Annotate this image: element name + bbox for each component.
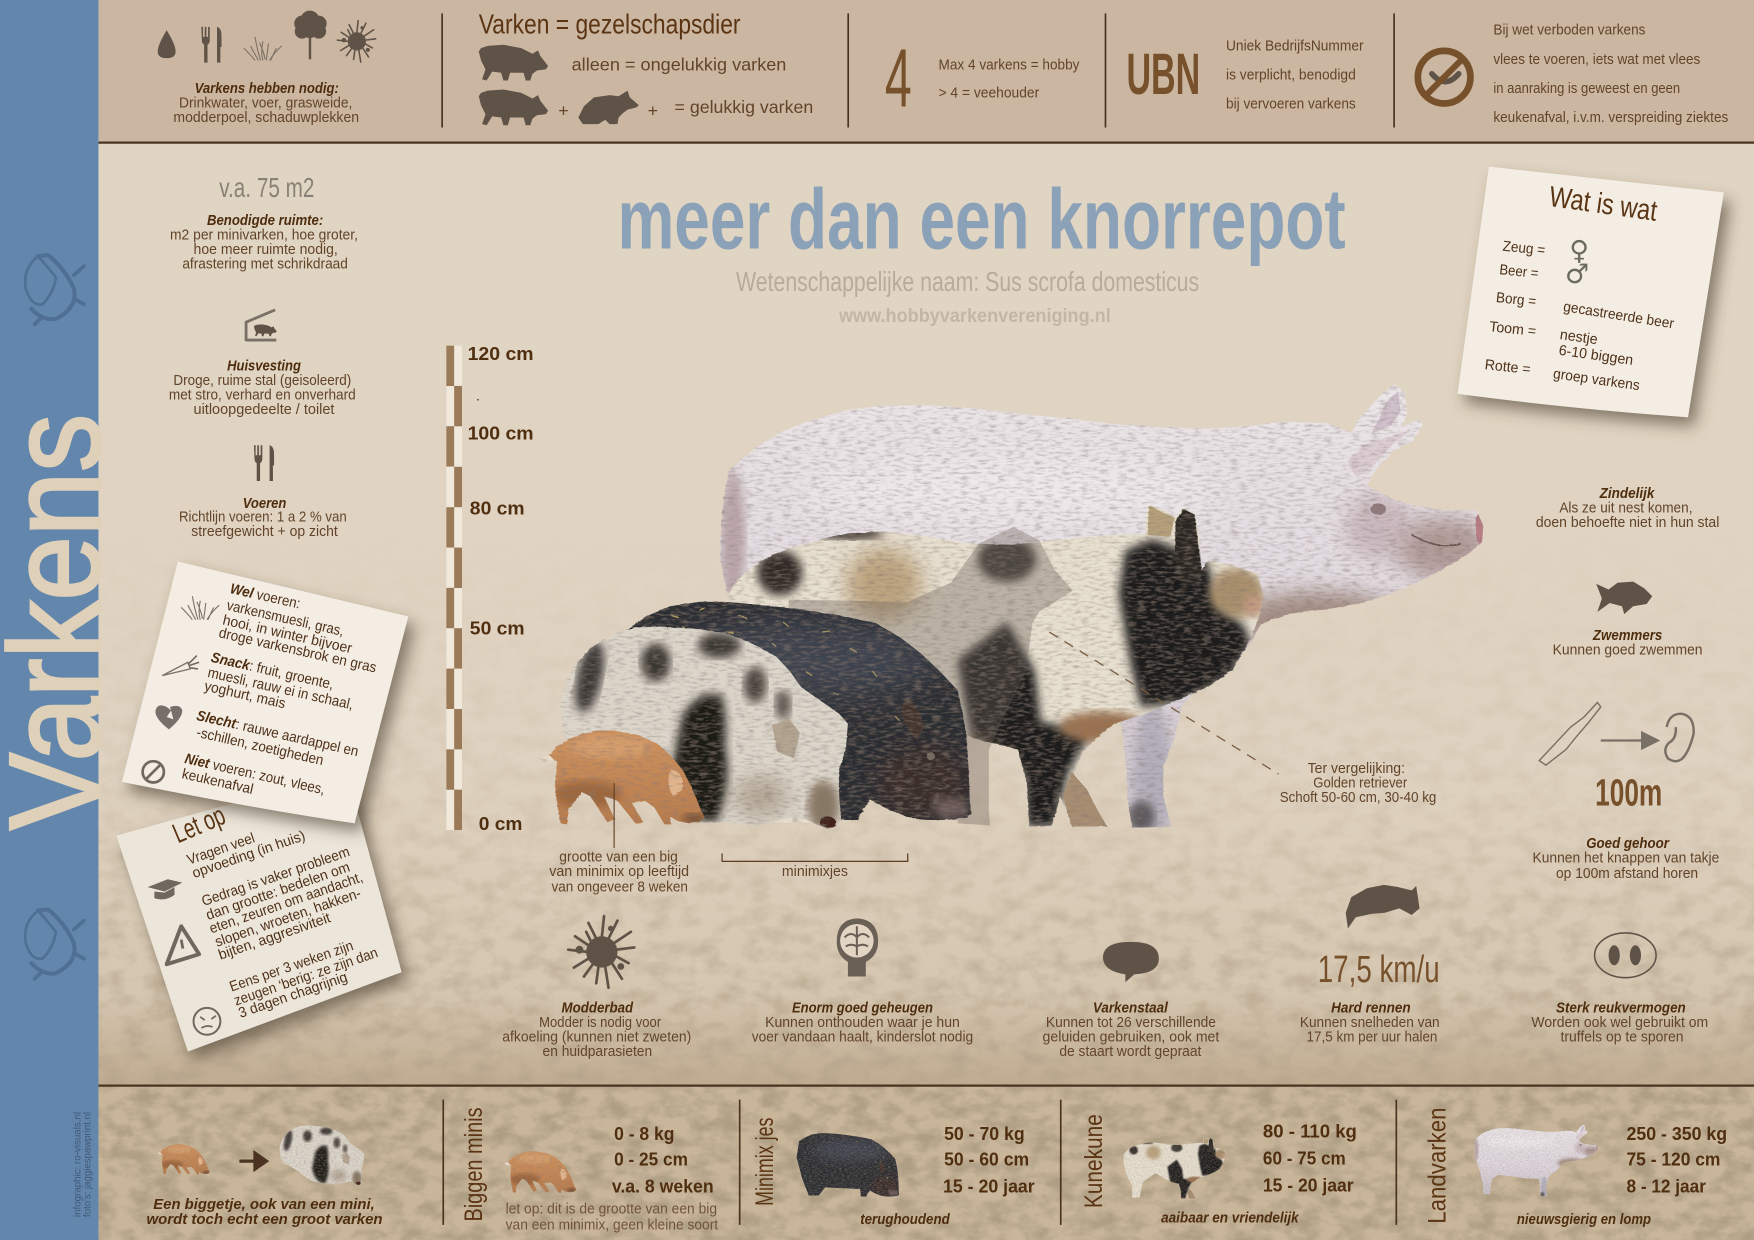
text: needs: modderpoel, schaduwplekken: [173, 109, 359, 126]
panel: minimix: 50 - 60 cm: [944, 1149, 1029, 1170]
heading: biggen minis: Biggen minis: [461, 1107, 488, 1222]
text: note lines: eten, zeuren om aandacht,: [208, 870, 365, 937]
text: max four: Max 4 varkens = hobby: [939, 56, 1080, 73]
text: note lines: Niet voeren: zout, vlees,: [183, 751, 326, 798]
text: note lines: bijten, aggresiviteit: [216, 910, 333, 964]
label: 100m: 100m: [1595, 772, 1662, 814]
text: definitions: Zeug =: [1502, 239, 1546, 259]
panel: clean: [1536, 485, 1719, 531]
heading: companion: Varken = gezelschapsdier: [479, 9, 741, 40]
panel: hearing: Kunnen het knappen van takje: [1533, 849, 1719, 866]
icon: female sign: ♀: [1569, 236, 1589, 267]
heading: landvarken: Landvarken: [1424, 1107, 1451, 1224]
text: feeding: streefgewicht + op zicht: [191, 523, 339, 540]
icon: running pig: [1346, 885, 1420, 928]
panel: piglets: let op: dit is de grootte van een big: [506, 1201, 717, 1218]
icon: grumpy face: [194, 1008, 220, 1035]
panel: swimmers: Kunnen goed zwemmen: [1553, 641, 1703, 658]
panel: landvarken: nieuwsgierig en lomp: [1517, 1211, 1651, 1228]
text: note lines: Vragen veel: [185, 830, 257, 868]
arrow: [239, 1153, 266, 1169]
text: definitions: [1484, 239, 1675, 394]
text: note lines: keukenafval: [180, 766, 255, 798]
text: space: [170, 212, 358, 272]
icon: grass: [181, 596, 219, 620]
panel: housing: [169, 310, 356, 418]
text: note lines: Snack: fruit, groente,: [209, 650, 335, 693]
icon: prohibited sausage: [1418, 51, 1470, 103]
panel: landvarken: 8 - 12 jaar: [1626, 1175, 1706, 1196]
panel: piglet grows: Een biggetje, ook van een mini,: [153, 1196, 375, 1213]
panel: pig language: Varkenstaal: [1093, 999, 1169, 1016]
text: note lines: hooi, in winter bijvoer: [221, 612, 354, 657]
text: definitions: 6-10 biggen: [1558, 343, 1634, 369]
text: space: m2 per minivarken, hoe groter,: [170, 226, 358, 243]
panel: companion animal: [479, 9, 813, 125]
credits: foto's: jaggiespawprint.nl: [83, 1112, 94, 1217]
icon: male sign: ♂: [1565, 259, 1589, 290]
icon: broken heart: [155, 705, 182, 729]
text: UBN: is verplicht, benodigd: [1226, 66, 1356, 83]
text: no meat: [1493, 22, 1728, 126]
panel: pig language: geluiden gebruiken, ook met: [1043, 1028, 1220, 1045]
panel: kunekune: [1081, 1114, 1357, 1227]
note paper: [122, 562, 408, 823]
text: note lines: dan grootte: bedelen om: [204, 860, 352, 924]
number: 4: 4: [885, 31, 912, 124]
icon: mud splat: [337, 21, 376, 62]
text: no meat: in aanraking is geweest en geen: [1493, 80, 1680, 97]
panel: minimix: 50 - 70 kg: [944, 1123, 1025, 1144]
icon: warning triangle: [167, 926, 199, 964]
panel: smell: truffels op te sporen: [1560, 1028, 1684, 1045]
panel: landvarken: 75 - 120 cm: [1626, 1149, 1720, 1170]
text: note lines: Eens per 3 weken zijn: [228, 938, 356, 995]
callout: retriever: Golden retriever: [1313, 775, 1407, 792]
icon: snout: [1595, 933, 1656, 978]
panel: pig language: [1043, 942, 1220, 1060]
panel: smell: [1531, 933, 1708, 1045]
callout: piglet size: [549, 783, 689, 896]
icon: speech bubble: [1103, 942, 1159, 982]
panel: kunekune: 60 - 75 cm: [1263, 1147, 1346, 1168]
panel: piglet grows: wordt toch echt een groot varken: [147, 1211, 383, 1228]
panel: mud bath: afkoeling (kunnen niet zweten): [502, 1028, 691, 1045]
icon: tree: [294, 11, 327, 59]
panel: no meat: [1418, 22, 1728, 126]
label: UBN: UBN: [1126, 42, 1200, 107]
text: feeding: Voeren: [243, 495, 286, 512]
text: UBN: bij vervoeren varkens: [1226, 96, 1356, 113]
panel: note wat is wat: [1458, 167, 1724, 417]
text: note lines: 3 dagen chagrijnig: [237, 969, 350, 1022]
panel: kunekune: aaibaar en vriendelijk: [1161, 1210, 1300, 1227]
ruler labels: 100 cm: [468, 423, 534, 444]
callout: piglet size: van ongeveer 8 weken: [551, 879, 688, 896]
icon: arrow: [1601, 733, 1658, 748]
ruler labels: 80 cm: [470, 498, 525, 519]
panel: memory: Enorm goed geheugen: [792, 999, 933, 1016]
panel: clean: doen behoefte niet in hun stal: [1536, 514, 1719, 531]
pig: spotted minimix: [560, 626, 848, 830]
icon: cutlery: [201, 27, 221, 63]
band: top rules: [98, 0, 1754, 144]
photo: landvarken: [1474, 1125, 1599, 1198]
icon: prohibited: [143, 761, 164, 782]
text: housing: Droge, ruime stal (geisoleerd): [173, 372, 351, 389]
text: alone: alleen = ongelukkig varken: [572, 54, 786, 74]
pig: landvarken: [720, 384, 1490, 839]
icon: water drop: [158, 30, 176, 58]
text: note lines: muesli, rauw ei in schaal,: [206, 665, 355, 713]
ruler labels: .: [477, 392, 480, 403]
panel: mud bath: en huidparasieten: [543, 1043, 652, 1060]
text: max four: > 4 = veehouder: [939, 84, 1039, 101]
note paper: [116, 772, 402, 1052]
text: housing: [169, 357, 356, 418]
panel: running: Hard rennen: [1331, 999, 1411, 1016]
icon: cutlery: [254, 445, 274, 481]
panel: smell: Sterk reukvermogen: [1556, 999, 1686, 1016]
panel: smell: Worden ook wel gebruikt om: [1531, 1014, 1708, 1031]
text: pluses: +: [558, 100, 569, 120]
heading: kunekune: Kunekune: [1081, 1114, 1108, 1208]
text: pluses: +: [648, 100, 658, 120]
icon: mud splat: [568, 916, 634, 988]
subtitle: Wetenschappelijke naam: Sus scrofa domesticus: [736, 266, 1199, 297]
text: definitions: nestje: [1559, 327, 1599, 348]
pig: piglet: [539, 730, 707, 824]
text: definitions: Rotte =: [1484, 357, 1531, 378]
icon: lonely pig: [479, 45, 548, 81]
panel: running: 17,5 km per uur halen: [1307, 1028, 1437, 1045]
text: space: hoe meer ruimte nodig,: [194, 241, 338, 258]
text: definitions: gecastreerde beer: [1562, 299, 1675, 332]
panel: mud bath: [502, 916, 691, 1060]
text: feeding: [179, 495, 347, 540]
callout: minimixjes bracket: minimixjes: [782, 863, 848, 880]
text: note lines: yoghurt, mais: [203, 678, 287, 712]
icon: twig: [1539, 702, 1601, 765]
panel: pig language: de staart wordt gepraat: [1059, 1043, 1202, 1060]
chart: height ruler: [446, 343, 534, 834]
text: no meat: keukenafval, i.v.m. verspreiding ziektes: [1493, 109, 1728, 126]
panel: note let op: [116, 772, 402, 1052]
note paper: [1458, 167, 1724, 417]
panel: swimmers: [1553, 582, 1703, 658]
panel: landvarken: [1424, 1107, 1727, 1228]
text: definitions: groep varkens: [1552, 366, 1641, 394]
credits: infographic: ro-visuals.nl: [73, 1112, 84, 1217]
band: bottom breeds: [98, 1085, 1754, 1240]
callout: retriever: Ter vergelijking:: [1308, 760, 1405, 777]
icon: fish: [1596, 582, 1652, 614]
text: note lines: Wel voeren:: [228, 581, 302, 613]
text: no meat: vlees te voeren, iets wat met vlees: [1493, 51, 1700, 68]
text: housing: Huisvesting: [227, 357, 301, 374]
panel: clean: Als ze uit nest komen,: [1559, 499, 1692, 516]
credits: [73, 1112, 94, 1217]
panel: landvarken: 250 - 350 kg: [1626, 1123, 1727, 1144]
text: definitions: Toom =: [1488, 319, 1537, 340]
heading: wat is wat: Wat is wat: [1547, 181, 1659, 228]
ruler labels: 0 cm: [479, 813, 522, 834]
panel: minimix: 15 - 20 jaar: [943, 1175, 1035, 1196]
text: definitions: Borg =: [1495, 290, 1537, 310]
label: area: v.a. 75 m2: [219, 172, 314, 203]
photo: kunekune: [1123, 1137, 1226, 1199]
label: speed: 17,5 km/u: [1318, 949, 1440, 991]
text: note lines: -schillen, zoetigheden: [195, 725, 325, 769]
icon: brain bulb: [837, 918, 878, 977]
icon: stable: [246, 310, 277, 341]
panel: memory: [752, 918, 973, 1045]
callout: piglet size: grootte van een big: [559, 848, 678, 865]
panel: hearing: op 100m afstand horen: [1556, 865, 1698, 882]
text: housing: met stro, verhard en onverhard: [169, 386, 356, 403]
panel: mud bath: Modderbad: [562, 999, 634, 1016]
panel: minimix: terughoudend: [860, 1211, 950, 1228]
text: feeding: Richtlijn voeren: 1 a 2 % van: [179, 508, 347, 525]
panel: running: Kunnen snelheden van: [1300, 1014, 1440, 1031]
background: mottled ground texture: [98, 691, 1754, 1084]
panel: memory: voer vandaan haalt, kinderslot nodig: [752, 1028, 973, 1045]
panel: hearing: Goed gehoor: [1586, 835, 1670, 852]
text: max four: [939, 56, 1080, 101]
text: note lines: droge varkensbrok en gras: [217, 625, 378, 676]
text: needs: Drinkwater, voer, grasweide,: [179, 94, 352, 111]
text: note lines: slopen, wroeten, hakken-: [213, 886, 363, 951]
sidebar: [0, 0, 128, 1240]
photo: small piglet: [157, 1144, 211, 1174]
panel: memory: Kunnen onthouden waar je hun: [765, 1014, 960, 1031]
text: pluses: [558, 100, 658, 120]
photo: piglet: [503, 1151, 577, 1193]
icon: grass: [244, 37, 282, 60]
panel: piglets: 0 - 8 kg: [614, 1123, 675, 1144]
icon: ear: [1665, 714, 1694, 761]
text: no meat: Bij wet verboden varkens: [1493, 22, 1645, 39]
text: definitions: Beer =: [1499, 262, 1539, 282]
callout: retriever: Schoft 50-60 cm, 30-40 kg: [1280, 789, 1436, 806]
panel: piglets: [461, 1107, 719, 1233]
pig: minimix: [617, 602, 971, 820]
text: note lines: opvoeding (in huis): [190, 828, 307, 882]
panel: kunekune: 80 - 110 kg: [1263, 1121, 1357, 1142]
panel: max four: [885, 31, 1080, 124]
panel: kunekune: 15 - 20 jaar: [1263, 1174, 1354, 1195]
panel: pig language: Kunnen tot 26 verschillende: [1046, 1014, 1216, 1031]
panel: piglets: v.a. 8 weken: [612, 1175, 714, 1196]
icon: carrot: [162, 656, 199, 676]
icon: graduation cap: [148, 879, 182, 899]
text: happy: = gelukkig varken: [675, 97, 813, 117]
title: meer dan een knorrepot: [617, 172, 1346, 267]
panel: piglets: van een minimix, geen kleine soort: [506, 1216, 719, 1233]
panel: hearing: [1533, 702, 1719, 882]
panel: clean: Zindelijk: [1599, 485, 1656, 502]
panel: note feeding: [122, 562, 408, 823]
callout: minimixjes bracket: [722, 854, 908, 880]
pig: kunekune: [726, 505, 1264, 827]
panel: space: [170, 172, 358, 272]
text: UBN: [1226, 37, 1364, 113]
panel: feeding: [179, 445, 347, 540]
panel: mud bath: Modder is nodig voor: [539, 1014, 661, 1031]
panel: needs: [158, 11, 376, 126]
ruler labels: [468, 343, 534, 834]
heading: let op: Let op: [168, 799, 230, 849]
panel: running: [1300, 885, 1440, 1045]
text: note lines: varkensmuesli, gras,: [225, 598, 345, 640]
icon: pair of pigs: [479, 89, 639, 125]
logo: curled pig top: [25, 255, 84, 324]
text: needs: [173, 80, 359, 126]
text: note lines: Slecht: rauwe aardappel en: [195, 708, 360, 760]
photo: spotted pig: [279, 1126, 364, 1186]
text: space: afrastering met schrikdraad: [182, 255, 348, 272]
panel: minimix: [752, 1118, 1035, 1228]
panel: UBN: [1126, 37, 1364, 113]
logo: curled pig bottom: [25, 909, 84, 979]
heading: minimixjes: Minimix jes: [752, 1118, 779, 1206]
text: note lines: zeugen ‘berig: ze zijn dan: [232, 945, 380, 1009]
text: note lines: [180, 581, 378, 798]
text: note lines: [185, 828, 380, 1022]
callout: piglet size: van minimix op leeftijd: [549, 863, 689, 880]
text: note lines: Gedrag is vaker probleem: [200, 844, 352, 910]
photo: pigs size comparison: [539, 384, 1490, 839]
ruler labels: 120 cm: [468, 343, 534, 364]
text: UBN: Uniek BedrijfsNummer: [1226, 37, 1364, 54]
website: www.hobbyvarkenvereniging.nl: [838, 306, 1111, 327]
photo: minimix: [797, 1133, 899, 1196]
text: needs: Varkens hebben nodig:: [195, 80, 339, 97]
text: space: Benodigde ruimte:: [207, 212, 323, 229]
callout: retriever: [1049, 632, 1436, 806]
ruler labels: 50 cm: [470, 617, 525, 638]
panel: swimmers: Zwemmers: [1592, 627, 1662, 644]
silhouette: golden retriever: [789, 527, 1073, 826]
panel: piglet grows: [147, 1126, 383, 1228]
text: housing: uitloopgedeelte / toilet: [194, 401, 335, 418]
panel: piglets: 0 - 25 cm: [614, 1149, 688, 1170]
